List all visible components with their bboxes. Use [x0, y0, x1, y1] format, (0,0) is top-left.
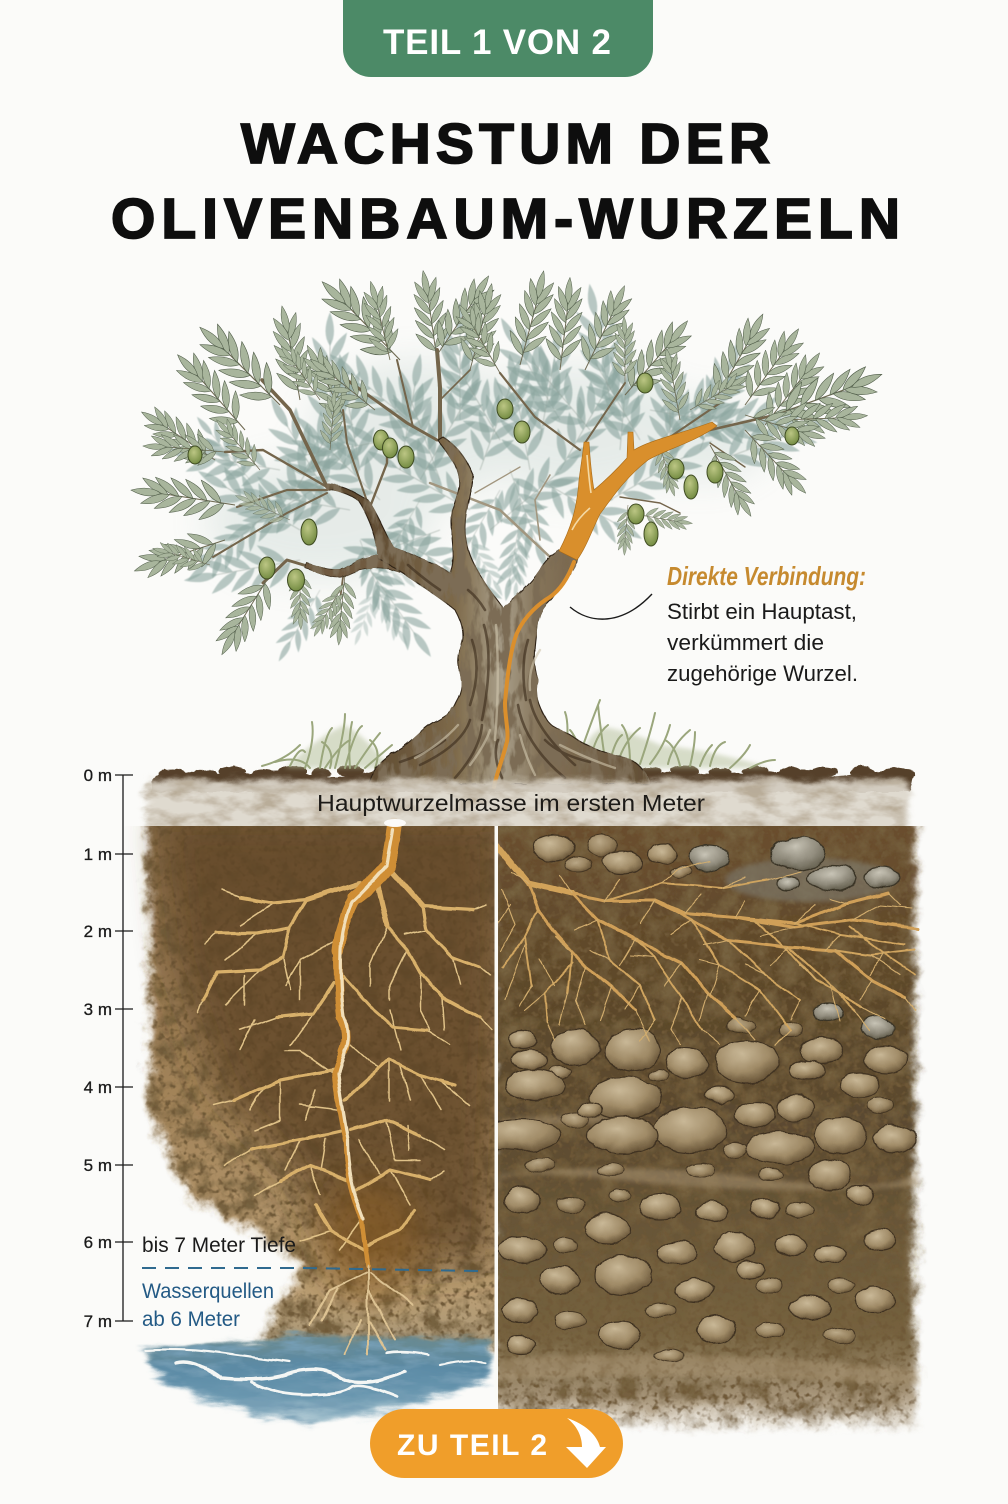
title: [111, 112, 900, 251]
canopy shadow foliage: [159, 279, 839, 671]
depth labels: 2 m: [84, 922, 112, 941]
annotation: water sources: [142, 1280, 274, 1331]
centre divider: [494, 826, 498, 1402]
rocks: [480, 835, 917, 1354]
annotation: water sources: Wasserquellen: [142, 1280, 274, 1303]
depth labels: 6 m: [84, 1233, 112, 1252]
canopy wash: [205, 360, 770, 580]
grass soft wash: [285, 725, 770, 768]
orange line through trunk: [494, 562, 574, 787]
callout: direct connection: [570, 561, 866, 686]
orange limb: [559, 422, 717, 560]
depth labels: [84, 766, 112, 1331]
button: to part 2: [370, 1409, 623, 1478]
fine rootlets: [198, 890, 492, 1250]
water ripples: [144, 1349, 485, 1397]
side branch: [305, 552, 400, 577]
taproot tip: [384, 819, 406, 827]
callout text: zugehörige Wurzel.: [667, 661, 858, 686]
callout heading: Direkte Verbindung:: [667, 561, 866, 591]
panel: left soil section: [148, 815, 505, 1350]
water line dashed: [142, 1268, 480, 1271]
illustration: olive tree: [127, 264, 891, 787]
trunk and limbs: [305, 437, 650, 784]
front foliage sprigs: [127, 264, 891, 665]
callout leader line: [570, 594, 652, 619]
title: WACHSTUM DER: [241, 112, 770, 176]
orange highlight: [572, 455, 591, 530]
band label: Hauptwurzelmasse im ersten Meter: [317, 790, 705, 816]
rock soil base: [492, 815, 914, 1425]
highlighted branch to root path: [494, 422, 717, 787]
axis: [115, 775, 133, 1321]
lateral root system in rocky soil: [495, 843, 918, 1045]
callout text: Stirbt ein Hauptast,: [667, 599, 857, 624]
depth labels: 4 m: [84, 1078, 112, 1097]
title: OLIVENBAUM-WURZELN: [111, 187, 900, 251]
topsoil crust: [150, 765, 915, 792]
main side roots: [203, 870, 480, 1250]
grass tufts: [262, 700, 775, 768]
depth labels: 3 m: [84, 1000, 112, 1019]
main lateral roots: [495, 843, 572, 893]
taproot: [355, 826, 394, 897]
surface layer: [138, 772, 914, 827]
soil warm patch: [320, 1180, 420, 1300]
depth labels: 1 m: [84, 845, 112, 864]
annotation: depth reach: bis 7 Meter Tiefe: [142, 1234, 296, 1257]
water body: [145, 1336, 490, 1424]
depth labels: 5 m: [84, 1156, 112, 1175]
depth labels: 7 m: [84, 1312, 112, 1331]
button: to part 2: ZU TEIL 2: [397, 1429, 547, 1462]
panel: right soil section: [480, 815, 918, 1425]
thin branches: [213, 350, 775, 600]
soil dark core: [160, 815, 500, 1270]
badge: part 1 of 2: [343, 0, 653, 77]
fine rootlets: [498, 862, 915, 1045]
secondary roots: [502, 880, 915, 1030]
callout text: [667, 599, 858, 686]
annotation: water sources: ab 6 Meter: [142, 1308, 240, 1331]
taproot highlight: [338, 830, 392, 1220]
roots below water line: [310, 1265, 412, 1355]
callout text: verkümmert die: [667, 630, 824, 655]
grey gravel patch: [725, 858, 895, 902]
thick root bases: [307, 870, 423, 927]
trunk silhouette: [327, 437, 650, 784]
badge: part 1 of 2: TEIL 1 VON 2: [383, 23, 611, 62]
icon: curved down arrow: [566, 1418, 606, 1468]
depth scale: [84, 766, 133, 1331]
grey rocks: [688, 837, 900, 1039]
tap root system in loose soil: [198, 826, 492, 1355]
groundwater section: [144, 1336, 490, 1424]
sediment bands: [498, 1115, 918, 1385]
grass blades: [262, 700, 775, 768]
bark and root marks: [400, 565, 615, 778]
olives: [188, 373, 799, 591]
depth labels: 0 m: [84, 766, 112, 785]
small pebbles: [524, 834, 893, 1362]
soil base: [148, 815, 505, 1350]
band: main root mass: [138, 772, 914, 826]
